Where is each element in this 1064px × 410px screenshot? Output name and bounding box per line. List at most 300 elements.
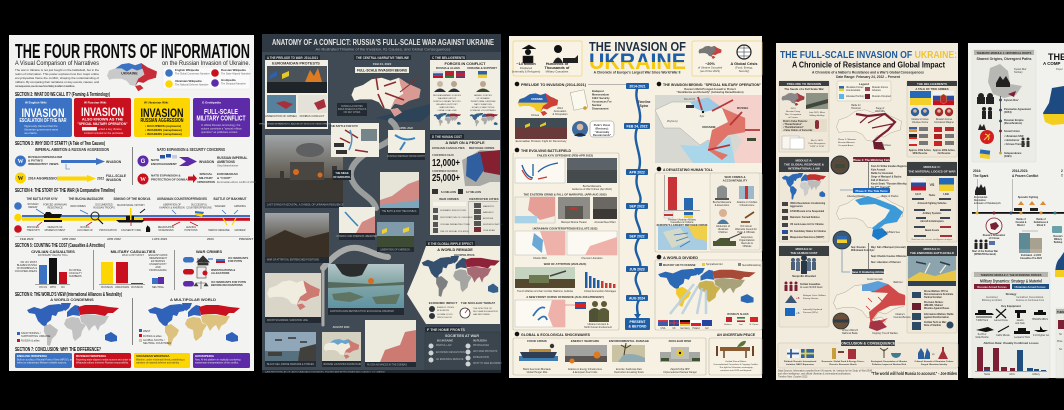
map: counteroffensive: KHARKIV AND KHERSON LIBERATED (337, 235, 378, 238)
section F: home fronts: IN UKRAINE (437, 338, 453, 342)
module 2: military dynamics: HIMARS MRLS (1032, 318, 1048, 321)
panel: module A: UNGA Resolutions Condemning (790, 202, 826, 205)
module 1: historical roots: THEMATIC MODULE 1: HISTORICAL ROOTS (977, 51, 1032, 55)
legend: Russian-Occupied (872, 96, 891, 98)
phase 1 list: Fall of Kherson (871, 179, 889, 182)
panel: module C: Artillery Systems (923, 212, 942, 215)
footer note: and other intelligence, and official Ukrainian & international publications. (778, 372, 851, 376)
conclusion cards: GROKIPEDIA (195, 354, 215, 358)
war crimes list: FOR PUTIN (228, 259, 242, 263)
module 1: historical roots: Territory (1014, 71, 1023, 74)
section D: human cost: AVDIIVKA (483, 217, 493, 220)
chart: military casualties: ESTIMATES (151, 260, 165, 263)
module 1: historical roots: Kyivan Rus' (1004, 98, 1019, 102)
panel: prelude to invasion: • False Claims of Genocide (783, 130, 813, 132)
section D: human toll: Officials (743, 245, 752, 248)
supporter flags: EU (705, 328, 709, 330)
casualty grid (1019, 231, 1043, 260)
module 2: military dynamics: Su-35 or (978, 333, 987, 336)
panel: the belligerents: 2m Reserve (938, 153, 951, 155)
module D: enduring battlefield: Role of Starlink (924, 324, 942, 327)
module B: human cost: Nonprofits Wounded (792, 275, 816, 278)
chart: military casualties: RUSSIAN (101, 285, 113, 289)
module B: human cost: Internally Displaced (803, 308, 823, 311)
conclusion cards: New, AI-led platform in explicitly countering (195, 358, 241, 362)
timeline: comparative war timeline: ACCUSED OF (77, 229, 93, 232)
conclusion cards: Reporting state-aligned media sources and under law, (76, 358, 133, 362)
panel: module C: Armored Fighting Vehicles (917, 202, 947, 205)
map: Ukraine with front line: UKRAINE (121, 72, 138, 76)
section F: global shockwaves: Attacks on Energy Infrastructure (568, 368, 603, 371)
Russia's allies flags (724, 313, 759, 326)
section C: belligerents: EU AID & SANCTIONS (472, 106, 495, 109)
photo: Kakhovka dam (328, 264, 404, 315)
section D: human cost: DESTROYED CITIES (469, 197, 499, 201)
timeline columns: T (1061, 174, 1063, 178)
section A: prelude: DONBAS CONFLICT (300, 114, 325, 118)
panel: module C: 3,417 (915, 193, 922, 196)
timeline: comparative war timeline: HEROIC DEFENSE (208, 229, 230, 232)
column: imperial ambition: W (18, 159, 24, 165)
module 2: military dynamics: AFVs (1009, 373, 1016, 376)
conclusion cards (15, 353, 250, 368)
section C: belligerents: RUSSIAN ARMED FORCES (433, 94, 461, 97)
module 1: historical roots: Russian Empire (1004, 118, 1024, 122)
map: eastern front present (365, 320, 416, 367)
section E: global ripple effect (407, 241, 500, 324)
column: imperial ambition: RUSSIAN IMPERIALISM (28, 155, 63, 159)
module 2: military dynamics: Attrition Data: Visually Confirmed Losses (983, 341, 1039, 345)
chart: military casualties: AND (155, 266, 161, 269)
section C: evolving battlefield: Bucha Massacre (583, 185, 602, 188)
intro text: encyclopedias frame the conflict, shaping the understanding of (15, 76, 99, 80)
module 1: historical roots: (Russification) (1004, 121, 1022, 125)
section F: global shockwaves: ENERGY WARFARE (571, 339, 599, 343)
timeline columns: Ilovaisk & (1016, 222, 1027, 224)
panel: Anatomy of a Conflict (259, 34, 503, 374)
panel: module C: VS (930, 183, 935, 187)
timeline: comparative war timeline: RESISTANCE (47, 206, 63, 210)
quote: "The world will hold Russia to account." - Joe Biden (871, 371, 957, 376)
section D: human toll: ICC Arrest (740, 225, 752, 228)
photo: liberation of Kherson: LIBERATION OF KHERSON (380, 248, 410, 252)
module 2: military dynamics (972, 272, 1050, 378)
legend: four encyclopedias: The State-Aligned Narrative (221, 72, 251, 76)
panel: prelude to invasion: • "Denazification" (783, 123, 802, 126)
Russia's allies flags: N. Korea (750, 323, 759, 326)
intro text (15, 68, 99, 88)
module B: human cost: Refugee Crisis: Millions (803, 294, 827, 297)
module 2: military dynamics: Strategy (1006, 292, 1017, 296)
central timeline label: FEB 24, 2022 (373, 62, 392, 66)
module D: enduring battlefield: Missiles Against Bases (924, 307, 950, 310)
legend: Ukrainian Forces (846, 86, 864, 89)
legend: Legend (859, 82, 869, 86)
section F: global shockwaves (513, 332, 706, 375)
panel: prelude to invasion: 2014 (791, 108, 796, 110)
module D: enduring battlefield: Civilian Tech as War: (924, 322, 947, 324)
section C: evolving battlefield: Critical Ammunition Shortages (584, 290, 617, 293)
timeline date pills: PRESENT (629, 320, 646, 324)
chart: military casualties: WHO LOST MOST (122, 253, 144, 257)
section A: prelude: "Historically (595, 131, 610, 134)
section D: human cost: D THE HUMAN COST (432, 135, 463, 139)
central map: Phase 1 invasion: Siege of (876, 108, 885, 110)
conclusion cards: narrative of national defense and identity. (136, 362, 180, 364)
section E: global ripple effect: E THE GLOBAL RIPPLE EFFECT (428, 242, 474, 246)
section A: prelude: Russian lands" (593, 134, 612, 137)
chart: civilian casualties: CIVILIAN CASUALTIES (31, 249, 75, 254)
module B: human cost: Civilian Casualties (800, 283, 821, 286)
phase 2 map: Liberated Kharkiv (847, 195, 866, 198)
timeline: comparative war timeline: THE BUCHA MASSACRE (68, 197, 104, 201)
illustrated road spine (323, 121, 397, 325)
Russia's allies flags: RUSSIA'S ALLIES (727, 313, 749, 316)
timeline: comparative war timeline: SINKING OF THE MOSKVA (114, 197, 151, 201)
section F: global shockwaves: Ecocide: Kakhovka Dam (616, 368, 642, 371)
section F: home fronts: ANTI-WAR PROTESTS (473, 350, 498, 353)
chart: military casualties (93, 249, 168, 290)
column: NATO expansion: Euromaidan-driven conflict of 2014 (217, 181, 256, 184)
panel: A Comparative (cropped at right edge) (968, 43, 1064, 378)
module B: human cost: At Least 30,000 Dead (800, 286, 823, 289)
central timeline label (354, 55, 411, 73)
section A: prelude (259, 55, 335, 129)
module D: enduring battlefield: Reconnaissance Dominate (924, 293, 954, 296)
column: imperial ambition: 2022 (97, 176, 104, 180)
legend: four encyclopedias (163, 67, 251, 89)
chart: civilian casualties: RU WHILE (69, 269, 82, 272)
section D: human cost: VUHLEDAR (483, 229, 495, 232)
timeline: comparative war timeline: FORCED UKRAINIAN (43, 204, 67, 206)
module B: human cost: MODULE B: (796, 247, 812, 251)
intro text: The war in Ukraine is not just fought on the battlefield, but in the (15, 68, 99, 72)
chart: civilian casualties: ON UN: MOST (20, 261, 37, 264)
section C: belligerents: TERRITORIAL DEFENSE (470, 100, 496, 103)
panel: module C: THE MATERIAL LOGICS OF WAR (908, 170, 956, 174)
intro text: millions. By comparing their narratives on key events, causes, and (15, 80, 99, 84)
section A: prelude: Memorandum (592, 92, 610, 96)
section F: global shockwaves: ENVIRONMENTAL DAMAGE (609, 339, 649, 343)
section A: prelude: 2014 (557, 107, 563, 110)
panel: module C: MODULE C: (924, 165, 940, 169)
card: Russian Wiki (74, 98, 131, 137)
phase 1 list (831, 156, 907, 190)
section F: home fronts (425, 327, 502, 370)
module D: enduring battlefield: THE ENDURING BATTLEFIELD (910, 251, 955, 255)
timeline columns: 2014: (973, 169, 981, 173)
section E: a world divided: MILITARY AID TO UKRAINE (663, 264, 696, 267)
section F: global shockwaves: Zaporizhzhia NPP (670, 368, 690, 371)
subtitle: An Illustrated Timeline of the Invasion, Its Causes, and Global Consequences (316, 46, 450, 52)
timeline columns: Start of the Donbas War (972, 250, 998, 253)
panel: prelude to invasion: War: Occupation (785, 113, 802, 116)
section D: human toll: EUROPE'S LARGEST REFUGEE CRISIS (657, 223, 708, 227)
conclusion cards: mainstream interpretations of the conflict. (195, 362, 239, 364)
phase 2 map: Phase 2: The Tide Turns (855, 189, 888, 193)
war crimes list (174, 249, 248, 290)
intro text: realm of information. This poster explores how four major online (15, 72, 99, 76)
module 1: historical roots: • Crimea Transfer (1004, 142, 1025, 146)
section C: belligerents: WAGNER GROUP (438, 97, 457, 100)
panel: module A (779, 157, 829, 242)
map: Kursk incursion: AUGUST 2024 (333, 326, 350, 329)
war crimes list: ALLEGATIONS (211, 271, 230, 275)
timeline: comparative war timeline: FEB 2022 (20, 237, 34, 241)
section E: global ripple effect: GEOPOLITICS (454, 253, 475, 257)
module 2: military dynamics: Anti-Tank (1015, 322, 1026, 325)
phase 1 list: Kyiv Assault (871, 168, 885, 172)
chart: civilian casualties: BLAMES RUSSIA (17, 264, 37, 267)
module 2: military dynamics: Glide Bombs (975, 337, 989, 339)
timeline: comparative war timeline: MISTAKEN (27, 226, 39, 229)
timeline: comparative war timeline: PRESENT (239, 237, 253, 241)
legend: Advance (872, 89, 882, 92)
panel: module C: Tanks (929, 195, 936, 197)
section E: a world divided: Sympathetic Aid (706, 263, 723, 266)
card: Grokipedia: FULL-SCALE (204, 107, 238, 116)
timeline columns: Minsk I (1017, 225, 1025, 227)
conclusion cards: Wikipedia editors minimize Russian responsibility. (76, 362, 129, 364)
chart: military casualties: INDEPENDENT (149, 257, 167, 260)
central map: Phase 1 invasion: Phase 1 Offensive (838, 139, 857, 141)
section E: global ripple effect: ECONOMIC IMPACT (429, 301, 457, 305)
chart: civilian casualties: DATING/BY DEATH TOLL (38, 253, 69, 257)
card: Ukrainian Wiki: • OCCUPIERS (окупанти) (145, 124, 181, 128)
module 1: historical roots: Shared Origins, Divergent Paths (976, 57, 1032, 61)
section C: belligerents: CHINA: DUAL-USE (437, 109, 457, 112)
section C: belligerents: RUSSIA & ALLIES (436, 66, 460, 70)
central map: Phase 1 invasion: Occupied Areas (838, 144, 854, 147)
card: Russian Wiki: united a key Ukraine (98, 127, 122, 131)
phase 3 map: Nov: Liberation of Kherson (871, 261, 901, 264)
section D: human cost: DEPORTATIONS OF CHILDREN (440, 216, 473, 219)
section C: belligerents: IRAN DRONES (439, 106, 455, 109)
title (cropped) (1043, 52, 1064, 71)
timeline: comparative war timeline: OFFENSIVES (158, 229, 174, 232)
photo: liberation of Kherson (377, 222, 414, 252)
timeline date pills: SEP 2022 (629, 204, 645, 208)
panel: the belligerents (907, 81, 957, 157)
timeline date pills: & BEYOND (629, 324, 647, 328)
chart: civilian casualties: WHO (50, 286, 56, 289)
card: Russian Wiki: W Russian Wiki (84, 100, 106, 104)
map: A Multipolar World (132, 297, 240, 346)
section E: global ripple effect: IN EUROPE (437, 310, 450, 312)
section A: prelude: (Revisory): (595, 128, 609, 130)
phase 1 list: Kerch Strait: "Russian Warship, (871, 182, 907, 186)
section 7 heading: SECTION 7: CONCLUSION: WHY THE DIFFERENCE? (15, 347, 101, 353)
panel: module C: Aircraft & Helicopters (920, 220, 945, 223)
section E: a world divided (655, 255, 762, 330)
intro text: consequences, we can see how history is written in real time. (15, 84, 75, 88)
module 2: military dynamics: F-16 Fighter Jet (1033, 334, 1049, 337)
module B: human cost: Fleeing Ukraine (803, 297, 819, 300)
section D: human cost: SEVERODONETSK (483, 224, 503, 226)
phase 3 map: Ukraine's (895, 313, 906, 316)
title (cropped): A COMP (1043, 61, 1060, 66)
card: English Wiki (15, 98, 72, 137)
chart: civilian casualties: OCCUPIED AREAS (15, 270, 37, 273)
section E: global ripple effect: A WORLD REMADE (437, 248, 473, 252)
panel: module A: Weaponized Sanctions (SWIFT) (790, 236, 825, 239)
map: A Multipolar World: WEST (143, 329, 151, 333)
legend: four encyclopedias: Ukrainian Wikipedia (175, 79, 202, 83)
module D: enduring battlefield: Precision Strikes: (924, 301, 944, 304)
section F: global shockwaves: Global Hunger Risk (527, 371, 548, 374)
phase 3 map: Ongoing: Trench Warfare (872, 332, 899, 335)
section D: human cost: USE OF SEXUAL VIOLENCE (440, 230, 470, 233)
phase 1 list: Siege of Mariupol & Bucha (871, 176, 902, 178)
timeline: comparative war timeline (14, 197, 253, 241)
chart: civilian casualties: NUMBERS (69, 275, 82, 278)
legend: four encyclopedias: Russian Wikipedia (221, 68, 246, 72)
Russia's allies flags: Iran (739, 323, 744, 326)
monitor icon and note: Military (1054, 238, 1063, 241)
section D: human cost: WAR CRIMES (439, 197, 459, 201)
section F: global shockwaves: Black Sea Grain Blockade (523, 368, 552, 371)
central map: invasion routes (337, 77, 432, 122)
module D: enduring battlefield: Drone Warfare: FPV & (924, 291, 948, 293)
section A: prelude: EUROMAIDAN PROTESTS (272, 62, 320, 66)
section D: human toll (655, 167, 762, 252)
chart: civilian casualties (15, 249, 82, 289)
central map: invasion routes: ON KEY CITIES (344, 112, 361, 114)
module 2: military dynamics: THEMATIC MODULE 2: THE OFFENSIVE FORCES (980, 273, 1042, 277)
panel: prelude to invasion: Putin's False Pretexts: (783, 120, 808, 123)
timeline: comparative war timeline: THEIR MTH (26, 229, 40, 232)
phase 3 map: May: Fall of Mariupol (Azovstal) (871, 246, 906, 249)
panel: the belligerents: Ukraine's Forces (911, 118, 929, 121)
footer band: DATA REPORTED AS OF LATEST AVAILABLE ESTIMATES; FIGURES ARE APPROXIMATE AND SUBJECT TO CHANGE (265, 370, 385, 374)
phase 1 list: Fast Air Strike Invades Regions (871, 165, 907, 168)
tagline (812, 70, 924, 79)
card: Grokipedia: operation" as politicians contest (201, 130, 238, 134)
chart: military casualties: PROPAGANDA (149, 269, 167, 272)
section: an uncertain peace: Uncoordinated Ceasefires & Ongoing Conflict. (714, 363, 759, 366)
section D: human cost (430, 134, 503, 235)
section B: invasion begins: Kyiv (700, 115, 705, 118)
map: A Multipolar World: NEUTRAL COUNTRIES (143, 341, 171, 345)
timeline: comparative war timeline: WAR CRIMES (70, 205, 86, 208)
photo: Kakhovka dam: KAKHOVKA DAM DESTRUCTION: ECOLOGICAL DISASTER (330, 310, 394, 313)
module B: human cost (779, 246, 829, 327)
card: Grokipedia: In official Russian terminology, the (201, 123, 241, 127)
panel: the belligerents: Volunteer Force (912, 121, 929, 124)
timeline spine: Spine (640, 104, 649, 108)
section A: prelude: Euromaidan Protests: Fight for Democracy (516, 139, 567, 143)
timeline: comparative war timeline: DEFEATS OF (48, 226, 63, 229)
section D: human toll: Casualties & Civilians (670, 221, 694, 224)
column: imperial ambition: IRREDENTIST VIEWS (28, 162, 59, 166)
legend: four encyclopedias: English Wikipedia (175, 68, 199, 72)
section E: global ripple effect: GLOBAL FOOD (437, 313, 453, 316)
conclusion cards: ENGLISH WIKIPEDIA (17, 354, 48, 358)
column: NATO expansion: NATO (151, 158, 160, 162)
central map: Phase 1 invasion: Hostomel (851, 107, 861, 110)
section D: human toll: Putin & Officials (737, 231, 756, 234)
timeline: comparative war timeline: THE BATTLE FOR KYIV (26, 197, 58, 201)
module D: enduring battlefield: Tactical Combat (924, 296, 942, 299)
timeline: comparative war timeline: CAUSED BY FIRE (121, 229, 141, 232)
panel: prelude to invasion: of Crimea (788, 116, 799, 119)
section E: a world divided: A WORLD DIVIDED (663, 256, 699, 260)
central map: Phase 1 invasion: Chernihiv (875, 110, 886, 113)
column: NATO expansion: MILITARY (199, 176, 213, 180)
timeline date pills (624, 83, 650, 330)
central map: Phase 1 invasion (836, 104, 902, 150)
panel: prelude to invasion: PRELUDE TO INVASION (787, 82, 821, 86)
card: Ukrainian Wiki: W Ukrainian Wiki (144, 100, 168, 104)
panel: module A: THE GLOBAL RESPONSE & (784, 162, 825, 166)
section A: prelude: Disarmament (592, 106, 609, 110)
section D: human cost: SUMMARY EXECUTIONS (440, 209, 466, 212)
phase 2 map: Battle of Kharkiv (882, 195, 899, 198)
column: NATO expansion: G (141, 159, 146, 165)
timeline date pills: AUG 2024 (629, 296, 645, 300)
title: THE INVASION OF (589, 40, 686, 54)
section D: human toll: Warrants Issued for (735, 228, 757, 231)
card: Ukrainian Wiki: • INVADERS (загарбники) (145, 128, 182, 132)
card: Grokipedia: G Grokipedia (202, 100, 221, 104)
section C: evolving battlefield: THE EVOLVING BATTLEFIELD (521, 149, 572, 153)
section A: prelude (515, 82, 626, 143)
timeline: comparative war timeline: POSITIONS (184, 229, 198, 232)
card: Ukrainian Wiki: • INVADERS (загарбники) (145, 132, 182, 136)
panel: the belligerents: A TALE OF TWO ARMIES (915, 87, 949, 91)
panel: The Four Fronts of Information (9, 35, 256, 371)
column: imperial ambition: W (18, 176, 24, 182)
column: imperial ambition: FULL-SCALE (106, 174, 126, 178)
timeline: comparative war timeline: 2023 (207, 237, 214, 241)
column: NATO expansion: INVASION (199, 160, 215, 164)
chart: military casualties: UNCERTAINTY (149, 263, 167, 266)
chart: civilian casualties: ON BOMBINGS & (17, 267, 37, 270)
timeline: comparative war timeline: COUNTEROFFENSIVE (186, 206, 212, 210)
supporter flags: Germany (680, 327, 691, 330)
timeline columns: Russia's Annexation (983, 234, 1006, 237)
section F: home fronts: SHIFT TO WAR ECONOMY (473, 362, 502, 365)
timeline: comparative war timeline: LEAVING (186, 226, 196, 229)
timeline columns: (DPR/LPR Declared) (974, 254, 996, 256)
legend: four encyclopedias: The Global Consensus Narrative (175, 72, 210, 76)
panel: prelude to invasion: Russian Proxy (786, 110, 801, 113)
section D: human toll: Recruits & (741, 242, 753, 245)
section D: human cost: CIVILIAN CASUALTIES (432, 146, 465, 150)
section C: evolving battlefield: FAILED KYIV OFFENSIVE (FEB-APR 2022) (537, 154, 593, 158)
section B: invasion begins (655, 82, 762, 163)
timeline columns: of Crimea (989, 238, 1000, 240)
column: NATO expansion: ENCROACHMENT (151, 162, 177, 166)
subtitle left: A Visual Comparison of Narratives (15, 61, 99, 67)
panel: module C: New low use sources intelligence analysis (912, 238, 953, 241)
stat box: displaced and casualties: Displaced (520, 66, 533, 70)
timeline: comparative war timeline: LIBERATION OF (163, 204, 182, 206)
conclusion cards: Wartime, under existential threat, prioritizing a (136, 358, 185, 362)
module 2: military dynamics: Leopard 2 Tank (1014, 336, 1031, 339)
conclusion band: Ecological: Devastation of Ukraine (871, 360, 908, 363)
timeline columns: A Frozen Conflict (1012, 174, 1039, 178)
section: an uncertain peace: AN UNCERTAIN PEACE (717, 333, 756, 337)
module D: enduring battlefield: HIMARS, Shahed (924, 304, 943, 307)
column: imperial ambition: 2014 AGGRESSION (28, 176, 60, 180)
section D: human toll: Attacks on Civilian (737, 201, 758, 204)
card: English Wiki: ESCALATION OF THE WAR (20, 118, 67, 124)
tagline: A Chronicle of a Nation's Resistance and a War's Global Consequences (812, 70, 924, 74)
section B: invasion begins: UKRAINE (702, 125, 716, 129)
timeline: comparative war timeline: DOCUMENTED (95, 204, 113, 206)
section B: invasion begins: "Demilitarize and Denazify" (Achieving Denazification) (677, 90, 744, 94)
